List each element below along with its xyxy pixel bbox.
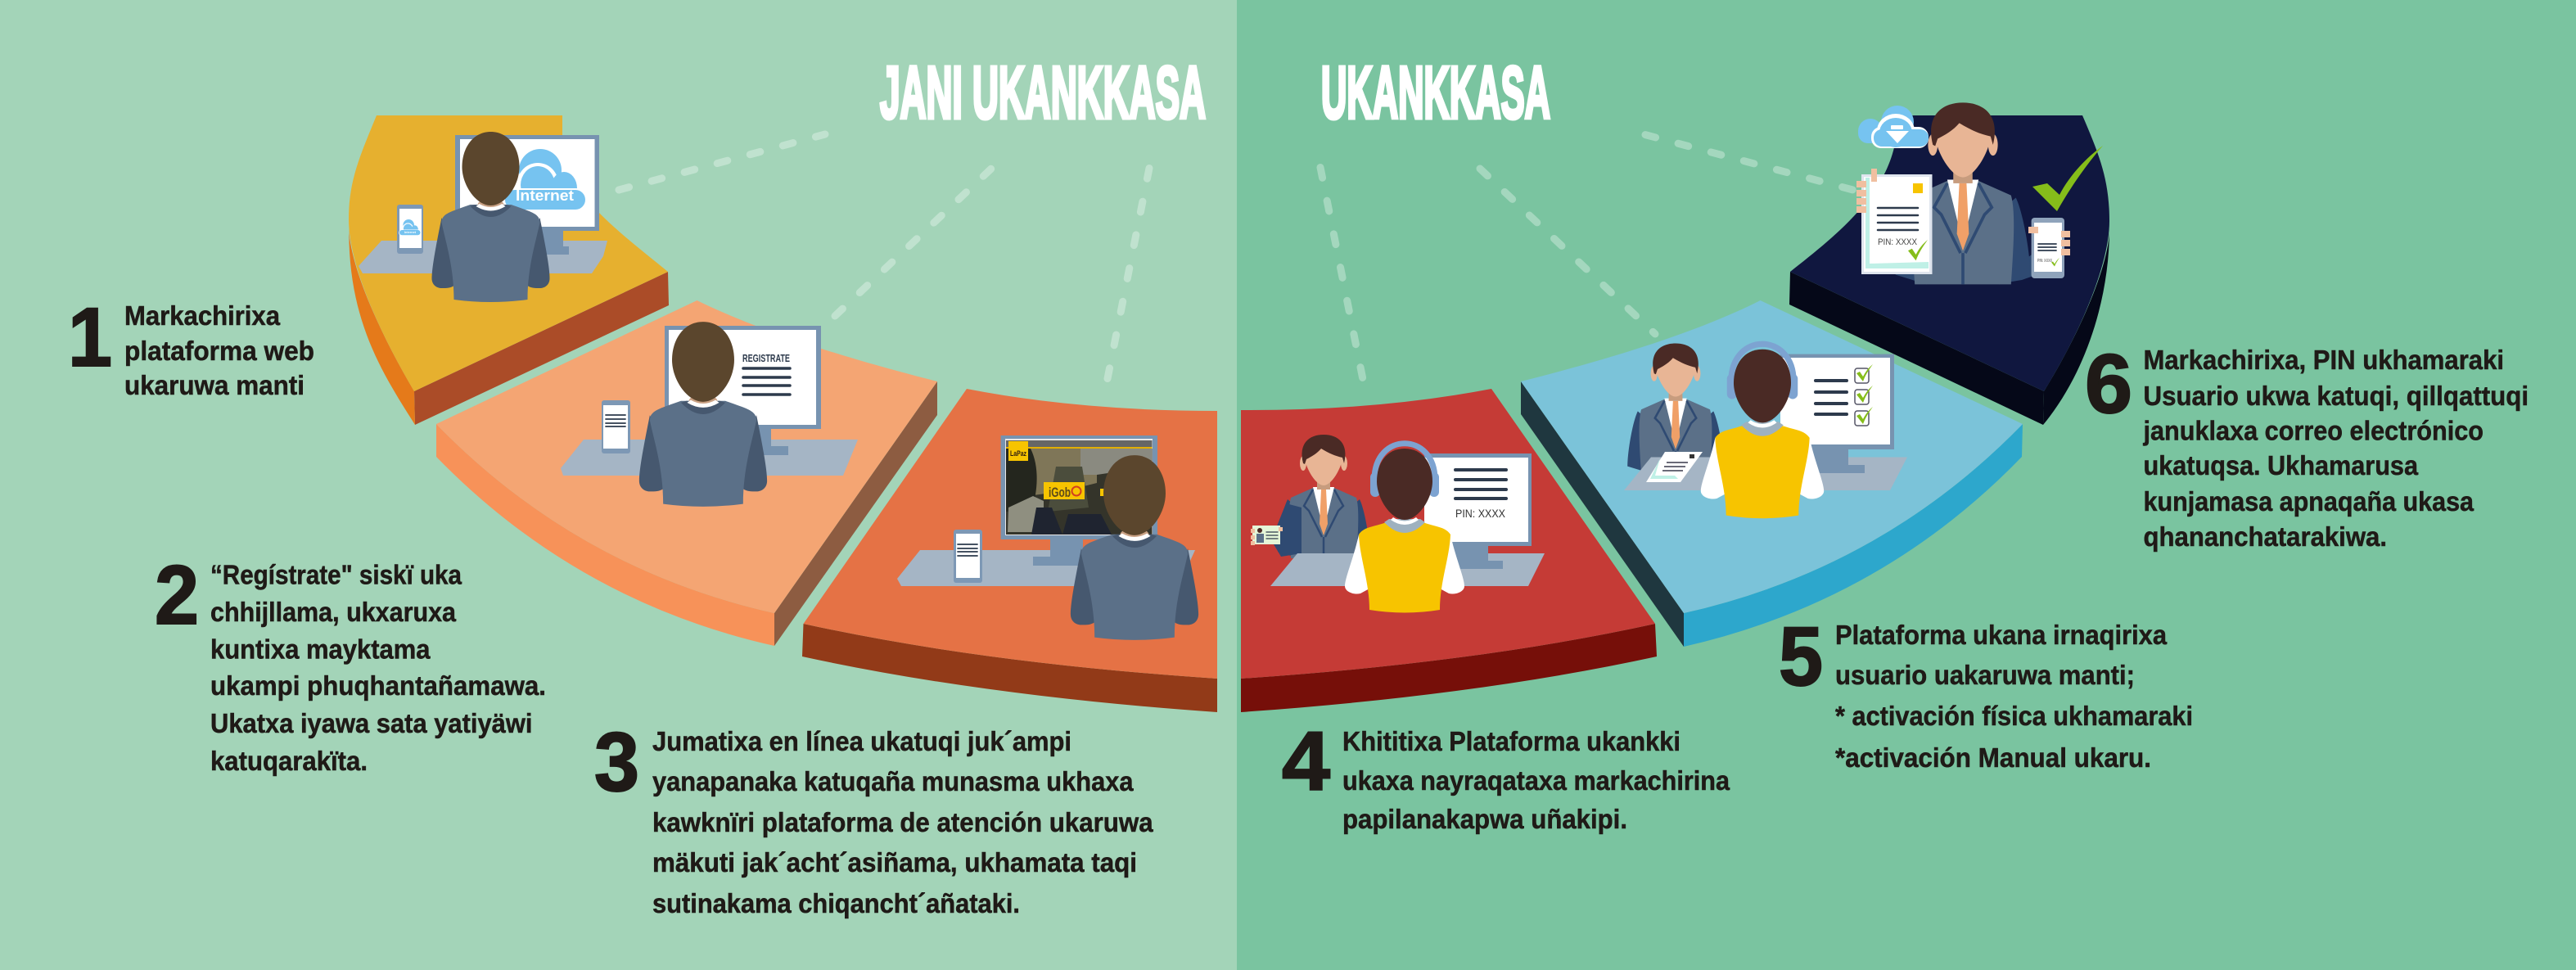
panel: left background <box>0 0 1237 970</box>
monitor 3 with iGob website: iGob <box>1049 485 1071 500</box>
text block: step 2 <box>155 548 546 776</box>
phone 3 <box>954 530 982 583</box>
phone with PIN: PIN: XXXX <box>2037 259 2052 264</box>
text block: step 6: ukatuqsa. Ukhamarusa <box>2143 450 2419 480</box>
text block: step 6: 6 <box>2085 337 2132 431</box>
person at computer 3 <box>1071 455 1198 640</box>
phone with PIN <box>2028 218 2070 278</box>
text block: step 2: Ukatxa iyawa sata yatiyäwi <box>210 708 532 738</box>
icon: large green check <box>2032 146 2103 211</box>
text block: step 5: *activación Manual ukaru. <box>1835 742 2151 773</box>
person at computer 2 <box>639 322 767 507</box>
desk 5 <box>1624 457 1907 490</box>
text block: step 4: 4 <box>1282 715 1330 808</box>
text block: step 1: Markachirixa <box>124 300 281 331</box>
PIN document held in hand <box>1856 169 1932 274</box>
text block: step 3: sutinakama chiqancht´añataki. <box>652 888 1020 918</box>
monitor 1 with internet cloud <box>455 135 599 255</box>
text block: step 4: Khititixa Plataforma ukankki <box>1342 726 1680 756</box>
monitor 2 with registration form <box>665 326 821 455</box>
text block: step 4: papilanakapwa uñakipi. <box>1342 804 1627 834</box>
text block: step 1: plataforma web <box>124 336 314 366</box>
text block: step 1 <box>68 291 314 400</box>
man with document and phone <box>1896 102 2038 284</box>
text block: step 3: Jumatixa en línea ukatuqi juk´ampi <box>652 726 1071 756</box>
text block: step 5: 5 <box>1779 610 1823 703</box>
text block: step 3: 3 <box>594 715 639 809</box>
text block: step 6: kunjamasa apnaqaña ukasa <box>2143 486 2474 517</box>
desk 1 <box>359 241 607 273</box>
text: UKANKKASA <box>1321 52 1550 134</box>
agent <box>1627 343 1724 473</box>
desk 4 <box>1270 553 1545 586</box>
monitor 4 with PIN: PIN: XXXX <box>1455 507 1506 520</box>
text block: step 1: ukaruwa manti <box>124 370 305 400</box>
text block: step 2: 2 <box>155 548 199 642</box>
text block: step 3 <box>594 715 1153 918</box>
text block: step 6: Usuario ukwa katuqi, qillqattuqi <box>2143 381 2529 411</box>
text block: step 2: katuqarakïta. <box>210 746 368 776</box>
panel: right background <box>1237 0 2576 970</box>
arrows: dashed connector lines <box>619 134 1856 380</box>
panel: step 4 platform <box>1241 389 1657 712</box>
text block: step 5: usuario uakaruwa manti; <box>1835 660 2135 690</box>
text: JANI UKANKKASA <box>880 52 1206 134</box>
panel: step 3 platform <box>802 389 1217 712</box>
PIN document held in hand: PIN: XXXX <box>1878 237 1918 247</box>
monitor 4 with PIN <box>1424 453 1532 569</box>
panel: step 2 platform <box>436 300 937 646</box>
text block: step 3: mäkuti jak´acht´asiñama, ukhamata taqi <box>652 847 1137 878</box>
text block: step 5 <box>1779 610 2193 773</box>
text block: step 5: * activación física ukhamaraki <box>1835 701 2193 731</box>
text block: step 2: “Regístrate" siskï uka <box>210 560 462 589</box>
text block: step 3: yanapanaka katuqaña munasma ukhaxa <box>652 766 1134 796</box>
desk 2 <box>561 440 858 476</box>
text block: step 4: ukaxa nayraqataxa markachirina <box>1342 765 1730 796</box>
operator with headset <box>1701 344 1824 518</box>
text block: step 2: ukampi phuqhantañamawa. <box>210 670 546 701</box>
text block: step 3: kawknïri plataforma de atención ukaruwa <box>652 807 1153 837</box>
text block: step 6: qhananchatarakiwa. <box>2143 521 2387 552</box>
monitor 1 with internet cloud: Internet <box>516 187 574 204</box>
panel: step 5 platform <box>1521 300 2023 647</box>
phone 1: Internet <box>404 230 417 234</box>
desk 3 <box>897 550 1195 586</box>
person at computer 1 <box>432 132 550 302</box>
text block: step 6 <box>2085 337 2529 552</box>
phone 2 <box>602 400 630 453</box>
text block: step 2: chhijllama, ukxaruxa <box>210 597 457 627</box>
panel: step 6 platform <box>1789 102 2109 425</box>
monitor 5 with checklist <box>1780 354 1894 473</box>
text block: step 4 <box>1282 715 1730 834</box>
monitor 2 with registration form: REGISTRATE <box>742 353 790 364</box>
text block: step 1: 1 <box>68 291 112 384</box>
text block: step 6: januklaxa correo electrónico <box>2143 416 2484 445</box>
text block: step 6: Markachirixa, PIN ukhamaraki <box>2143 345 2504 375</box>
text block: step 5: Plataforma ukana irnaqirixa <box>1835 620 2168 650</box>
agent showing ID card <box>1251 435 1369 558</box>
text block: step 2: kuntixa mayktama <box>210 634 431 665</box>
document on desk <box>1646 452 1703 482</box>
monitor 3 with iGob website <box>1001 435 1157 566</box>
monitor 3 with iGob website: LaPaz <box>1010 449 1026 458</box>
panel: step 1 platform <box>349 115 669 425</box>
icon: download cloud <box>1858 106 1929 148</box>
phone 1 <box>397 205 423 254</box>
operator with headset <box>1345 444 1464 612</box>
